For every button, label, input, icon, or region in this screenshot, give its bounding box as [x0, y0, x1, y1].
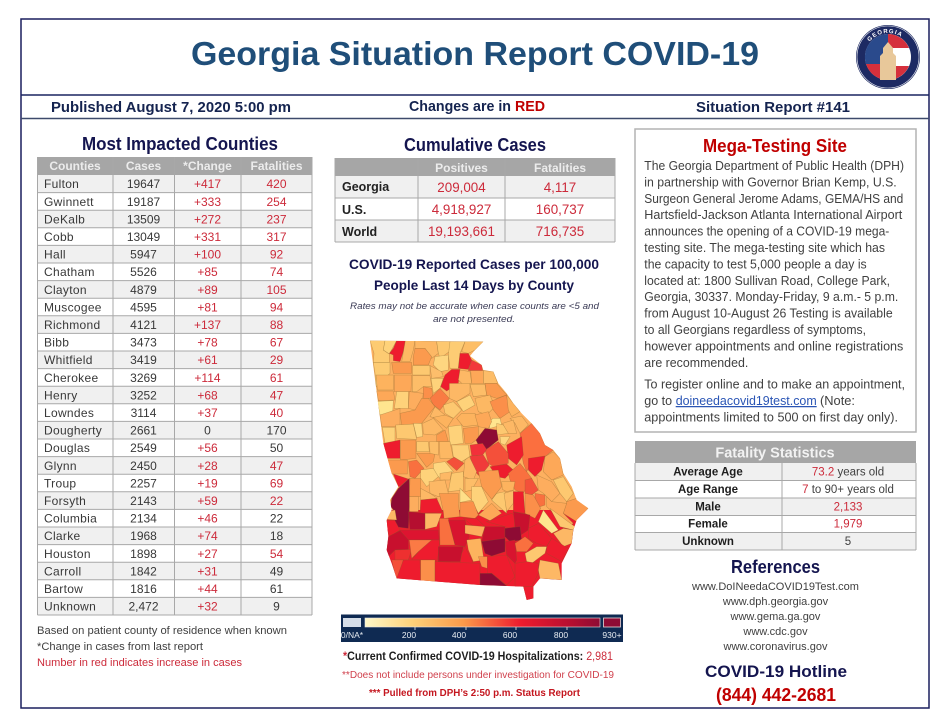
row: Clarke: 18 — [270, 529, 283, 543]
row: unknown — [682, 536, 851, 548]
row: female — [688, 518, 862, 530]
row: age range: 7 to 90+ years old — [802, 484, 894, 496]
row: Hall: 5947 — [130, 248, 157, 262]
row: Troup — [44, 476, 283, 490]
announcement text: announces the opening of a COVID-19 mega- — [644, 225, 889, 239]
row: Houston — [44, 547, 283, 561]
row: Unknown: 9 — [273, 600, 280, 614]
row: average age — [673, 466, 884, 478]
row: Fulton: 19647 — [127, 177, 161, 191]
row: Muscogee — [44, 300, 283, 314]
table header row — [49, 159, 303, 173]
row: Clarke: +74 — [197, 529, 218, 543]
map legend: 0/NA* — [341, 630, 364, 640]
row: Richmond — [44, 318, 283, 332]
row: Dougherty — [44, 424, 287, 438]
icon: Georgia emergency management seal: GEORGIA — [867, 28, 902, 41]
registration text: To register online and to make an appointment, — [644, 378, 905, 392]
row: World: 19,193,661 — [428, 224, 495, 239]
announcement text: Georgia, 30337. Monday-Friday, 9 a.m.- 5 p.m. — [644, 290, 898, 304]
panel: most impacted counties — [37, 134, 312, 669]
row: Lowndes: 40 — [270, 406, 283, 420]
row: World: 716,735 — [536, 224, 584, 239]
row: Gwinnett: 19187 — [127, 195, 161, 209]
row: Dougherty: Dougherty — [44, 424, 102, 438]
row: average age: 73.2 years old — [812, 466, 884, 478]
row: Henry: +68 — [197, 388, 218, 402]
announcement text: Surgeon General Jerome Adams, GEMA/HS and — [644, 192, 903, 206]
row: Columbia: 2134 — [130, 512, 157, 526]
row: Cherokee: 61 — [270, 371, 283, 385]
row: Hall — [44, 248, 283, 262]
row: Richmond: Richmond — [44, 318, 100, 332]
registration text: (Note: — [820, 394, 855, 408]
row: age range: Age Range — [678, 484, 738, 496]
row: Hall: +100 — [194, 248, 221, 262]
row: male — [695, 502, 862, 514]
note: status report source: *** Pulled from DPH’s 2:50 p.m. Status Report — [369, 687, 580, 699]
reference links: www.cdc.gov — [742, 626, 808, 638]
row: age range — [678, 484, 894, 496]
table: cumulative cases — [335, 158, 615, 242]
row: Georgia: 4,117 — [544, 180, 576, 195]
row: Douglas: 50 — [270, 441, 283, 455]
row: Lowndes: Lowndes — [44, 406, 94, 420]
row: DeKalb: 13509 — [127, 212, 161, 226]
map heading line 2: People Last 14 Days by County — [374, 277, 574, 293]
map legend: 200 — [402, 630, 416, 640]
row: Chatham: 74 — [270, 265, 283, 279]
row: Clayton: 4879 — [130, 283, 157, 297]
registration text — [644, 378, 905, 424]
situation report number: Situation Report #141 — [696, 99, 850, 116]
row: Lowndes: +37 — [197, 406, 218, 420]
row: Clarke: Clarke — [44, 529, 81, 543]
icon: Georgia emergency management seal — [856, 25, 920, 89]
map heading line 1: COVID-19 Reported Cases per 100,000 — [349, 256, 599, 272]
row: Gwinnett: +333 — [194, 195, 221, 209]
map legend: 600 — [503, 630, 517, 640]
row: Hall: 92 — [270, 248, 283, 262]
heading: cumulative cases: Cumulative Cases — [404, 135, 546, 155]
announcement text: are recommended. — [644, 356, 748, 370]
row: Richmond: +137 — [194, 318, 221, 332]
row: Gwinnett: 254 — [266, 195, 287, 209]
row: Dougherty: 170 — [266, 424, 287, 438]
hotline number: (844) 442-2681 — [716, 685, 836, 705]
announcement text: The Georgia Department of Public Health (DPH) — [644, 159, 904, 173]
reference links: www.dph.georgia.gov — [722, 596, 829, 608]
row: Bibb: 67 — [270, 336, 283, 350]
row: average age: Average Age — [673, 466, 743, 478]
row: Houston: +27 — [197, 547, 218, 561]
row: Glynn: +28 — [197, 459, 218, 473]
announcement text: the capacity to test 5,000 people a day is — [644, 257, 867, 271]
row: Richmond: 88 — [270, 318, 283, 332]
row: Whitfield: 29 — [270, 353, 283, 367]
header divider top — [21, 94, 929, 96]
row: Cherokee: 3269 — [130, 371, 157, 385]
hotline heading: COVID-19 Hotline — [705, 662, 847, 681]
row: Dougherty: 2661 — [130, 424, 157, 438]
row: Muscogee: +81 — [197, 300, 218, 314]
announcement text: from August 10-August 26 Testing is available — [644, 307, 893, 321]
row: Chatham: Chatham — [44, 265, 95, 279]
row: Clayton — [44, 283, 287, 297]
row: Cobb: Cobb — [44, 230, 74, 244]
panel: fatality statistics — [635, 441, 916, 550]
row: Houston: 1898 — [130, 547, 157, 561]
map legend: 800 — [554, 630, 568, 640]
row: Richmond: 4121 — [130, 318, 157, 332]
row: Cherokee: Cherokee — [44, 371, 98, 385]
row: Troup: Troup — [44, 476, 76, 490]
note: persons under investigation: **Does not include persons under investigation for COVID-19 — [342, 669, 614, 681]
row: female: 1,979 — [834, 518, 862, 530]
row: Fulton: 420 — [266, 177, 287, 191]
row: Bartow: +44 — [197, 582, 218, 596]
row: Bartow: Bartow — [44, 582, 83, 596]
row: Bartow: 1816 — [130, 582, 157, 596]
row: Chatham: +85 — [197, 265, 218, 279]
table: cumulative cases: Fatalities — [534, 161, 586, 175]
heading: references: References — [731, 557, 820, 577]
row: Troup: 69 — [270, 476, 283, 490]
row: Muscogee: Muscogee — [44, 300, 102, 314]
announcement text: located at: 1800 Sullivan Road, College Park, — [644, 274, 890, 288]
row: Unknown: Unknown — [44, 600, 96, 614]
row: Carroll: 49 — [270, 564, 283, 578]
reference links: www.DoINeedaCOVID19Test.com — [691, 581, 859, 593]
row: Dougherty: 0 — [204, 424, 211, 438]
table header row: Fatalities — [250, 159, 303, 173]
row: Unknown: +32 — [197, 600, 218, 614]
row: Clayton: +89 — [197, 283, 218, 297]
announcement text: to all Georgians regardless of symptoms, — [644, 323, 866, 337]
row: Georgia: Georgia — [342, 180, 390, 194]
row: Henry: Henry — [44, 388, 78, 402]
row: DeKalb: 237 — [266, 212, 287, 226]
row: Douglas: 2549 — [130, 441, 157, 455]
panel: cumulative cases — [335, 135, 615, 242]
row: Cherokee — [44, 371, 283, 385]
reference links — [691, 581, 859, 653]
row: Georgia: 209,004 — [437, 180, 486, 195]
row: Carroll — [44, 564, 283, 578]
row: Glynn: Glynn — [44, 459, 77, 473]
table header row: Counties — [49, 159, 101, 173]
row: Henry: 47 — [270, 388, 283, 402]
row: Cherokee: +114 — [194, 371, 221, 385]
row: Glynn: 47 — [270, 459, 283, 473]
map note — [350, 301, 600, 325]
row: DeKalb — [44, 212, 287, 226]
row: male: Male — [695, 502, 721, 514]
row: Gwinnett — [44, 195, 287, 209]
row: World: World — [342, 225, 377, 239]
row: Unknown — [44, 600, 280, 614]
row: Columbia — [44, 512, 283, 526]
row: Forsyth: +59 — [197, 494, 218, 508]
map note: Rates may not be accurate when case counts are <5 and — [350, 301, 600, 312]
hospitalizations count: *Current Confirmed COVID-19 Hospitalizations: 2,981 — [343, 651, 613, 663]
panel: reported cases map — [341, 256, 623, 699]
row: Unknown: 2,472 — [128, 600, 159, 614]
row: Bibb — [44, 336, 283, 350]
row: Forsyth: 2143 — [130, 494, 157, 508]
registration text: doineedacovid19test.com — [676, 394, 817, 408]
row: Carroll: Carroll — [44, 564, 81, 578]
panel: mega-testing site — [635, 129, 916, 432]
map note: are not presented. — [433, 314, 515, 325]
reference links: www.coronavirus.gov — [723, 641, 828, 653]
row: unknown: Unknown — [682, 536, 734, 548]
row: World — [342, 224, 584, 239]
row: U.S.: 160,737 — [536, 202, 584, 217]
table: cumulative cases: Positives — [435, 161, 488, 175]
row: Lowndes: 3114 — [131, 406, 157, 420]
panel: references — [691, 557, 859, 705]
row: Forsyth: Forsyth — [44, 494, 86, 508]
registration text: appointments limited to 500 on first day only). — [644, 410, 898, 424]
registration text: go to — [644, 394, 672, 408]
row: Chatham — [44, 265, 283, 279]
row: Cobb — [44, 230, 287, 244]
row: Muscogee: 94 — [270, 300, 283, 314]
row: Clayton: 105 — [266, 283, 287, 297]
row: Bartow: 61 — [270, 582, 283, 596]
table: counties — [38, 157, 312, 615]
row: Whitfield — [44, 353, 283, 367]
row: Douglas — [44, 441, 283, 455]
row: Columbia: 22 — [270, 512, 283, 526]
row: Houston: Houston — [44, 547, 91, 561]
row: U.S.: 4,918,927 — [432, 202, 491, 217]
announcement text: Hartsfield-Jackson Atlanta International Airport — [644, 208, 903, 222]
row: Troup: 2257 — [130, 476, 157, 490]
row: Bibb: Bibb — [44, 336, 69, 350]
published date: Published August 7, 2020 5:00 pm — [51, 99, 291, 116]
row: Carroll: 1842 — [130, 564, 157, 578]
announcement text: testing site. The mega-testing site which has — [644, 241, 885, 255]
row: Lowndes — [44, 406, 283, 420]
row: Bartow — [44, 582, 283, 596]
row: Douglas: Douglas — [44, 441, 90, 455]
heading: mega-testing site: Mega-Testing Site — [703, 136, 847, 156]
announcement text — [644, 159, 904, 370]
row: unknown: 5 — [845, 536, 851, 548]
row: Whitfield: +61 — [197, 353, 218, 367]
choropleth map of Georgia counties — [363, 337, 593, 607]
map legend — [341, 614, 623, 642]
row: DeKalb: DeKalb — [44, 212, 85, 226]
heading: most impacted counties: Most Impacted Counties — [82, 134, 278, 154]
row: Muscogee: 4595 — [130, 300, 157, 314]
row: Houston: 54 — [270, 547, 283, 561]
row: Cobb: 13049 — [127, 230, 161, 244]
table header row: Cases — [126, 159, 162, 173]
map legend: 930+ — [602, 630, 622, 640]
row: Forsyth: 22 — [270, 494, 283, 508]
row: Clayton: Clayton — [44, 283, 87, 297]
row: Fulton: Fulton — [44, 177, 79, 191]
row: Georgia — [342, 180, 576, 195]
footnote: change in cases: *Change in cases from last report — [37, 641, 203, 653]
row: Chatham: 5526 — [130, 265, 157, 279]
header divider bottom — [21, 118, 929, 120]
heading: fatality statistics: Fatality Statistics — [715, 446, 835, 462]
row: male: 2,133 — [834, 502, 862, 514]
row: Whitfield: 3419 — [130, 353, 157, 367]
title: Georgia Situation Report COVID-19 — [191, 35, 759, 72]
row: Troup: +19 — [197, 476, 218, 490]
row: U.S. — [342, 202, 584, 217]
map legend: 400 — [452, 630, 466, 640]
row: Henry: 3252 — [130, 388, 157, 402]
row: Fulton — [44, 177, 287, 191]
announcement text: however appointments and online registrations — [644, 339, 903, 353]
row: Fulton: +417 — [194, 177, 221, 191]
row: Glynn — [44, 459, 283, 473]
footnote: county of residence: Based on patient county of residence when known — [37, 625, 287, 637]
row: Henry — [44, 388, 283, 402]
announcement text: in partnership with Governor Brian Kemp, U.S. — [644, 175, 897, 189]
reference links: www.gema.ga.gov — [730, 611, 821, 623]
row: Hall: Hall — [44, 248, 66, 262]
row: DeKalb: +272 — [194, 212, 221, 226]
row: Bibb: 3473 — [130, 336, 157, 350]
row: Clarke — [44, 529, 283, 543]
row: female: Female — [688, 518, 728, 530]
row: Whitfield: Whitfield — [44, 353, 93, 367]
row: Columbia: Columbia — [44, 512, 97, 526]
row: Columbia: +46 — [197, 512, 218, 526]
table header row: *Change — [183, 159, 232, 173]
row: Cobb: +331 — [194, 230, 221, 244]
row: U.S.: U.S. — [342, 203, 366, 217]
changes note: Changes are in RED — [409, 98, 545, 115]
footnote: red numbers: Number in red indicates increase in cases — [37, 657, 242, 669]
row: Bibb: +78 — [197, 336, 218, 350]
row: Forsyth — [44, 494, 283, 508]
row: Douglas: +56 — [197, 441, 218, 455]
row: Gwinnett: Gwinnett — [44, 195, 94, 209]
row: Carroll: +31 — [197, 564, 218, 578]
row: Cobb: 317 — [266, 230, 287, 244]
row: Clarke: 1968 — [130, 529, 157, 543]
row: Glynn: 2450 — [130, 459, 157, 473]
